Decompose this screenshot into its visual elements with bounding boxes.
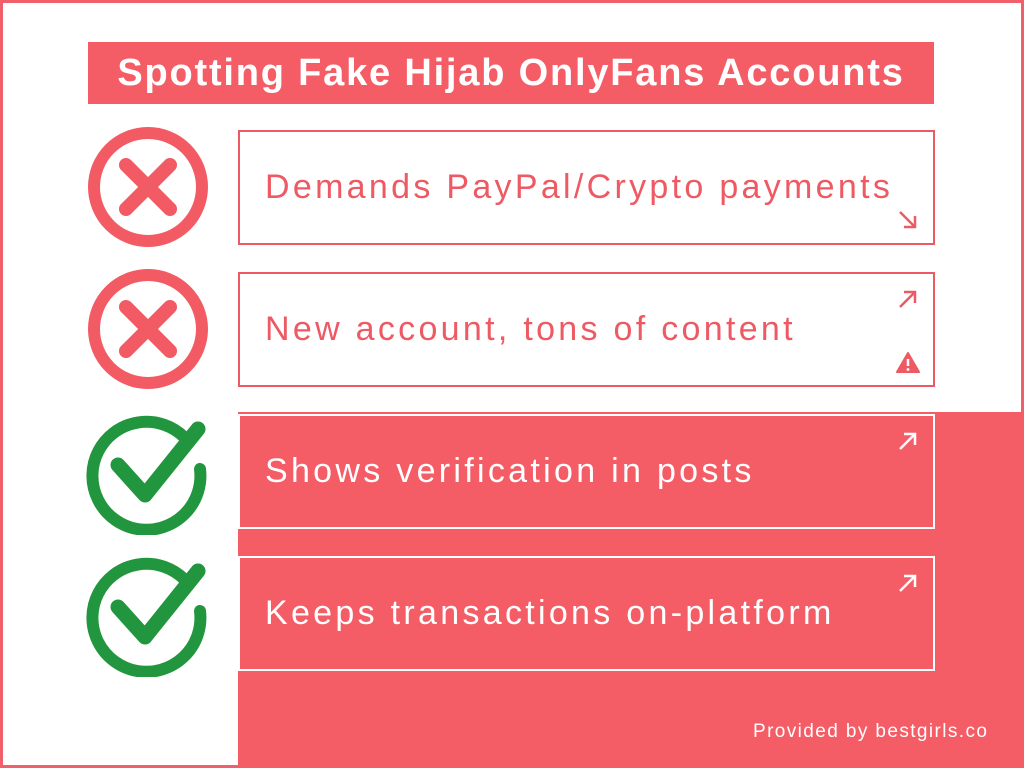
title: Spotting Fake Hijab OnlyFans Accounts <box>117 52 905 94</box>
box: keeps transactions: Keeps transactions on-platform <box>265 594 835 632</box>
box: new account: New account, tons of content <box>265 310 796 348</box>
icon: arrow up-right <box>899 290 916 308</box>
box: demands paypal <box>238 130 935 245</box>
icon: arrow up-right <box>899 432 916 450</box>
box: shows verification <box>238 414 935 529</box>
icon: warning <box>896 352 920 373</box>
icon: arrow up-right <box>899 574 916 592</box>
icon: red x 1 <box>88 127 208 247</box>
icon: arrow down-right <box>899 211 916 228</box>
box: shows verification: Shows verification in posts <box>265 452 755 490</box>
icon: red x 2 <box>88 269 208 389</box>
box: keeps transactions <box>238 556 935 671</box>
icon: green check 1 <box>86 416 206 535</box>
box: new account <box>238 272 935 387</box>
title <box>88 42 934 104</box>
box: demands paypal: Demands PayPal/Crypto payments <box>265 168 893 206</box>
credit: Provided by bestgirls.co <box>753 721 988 742</box>
icon: green check 2 <box>86 558 206 677</box>
